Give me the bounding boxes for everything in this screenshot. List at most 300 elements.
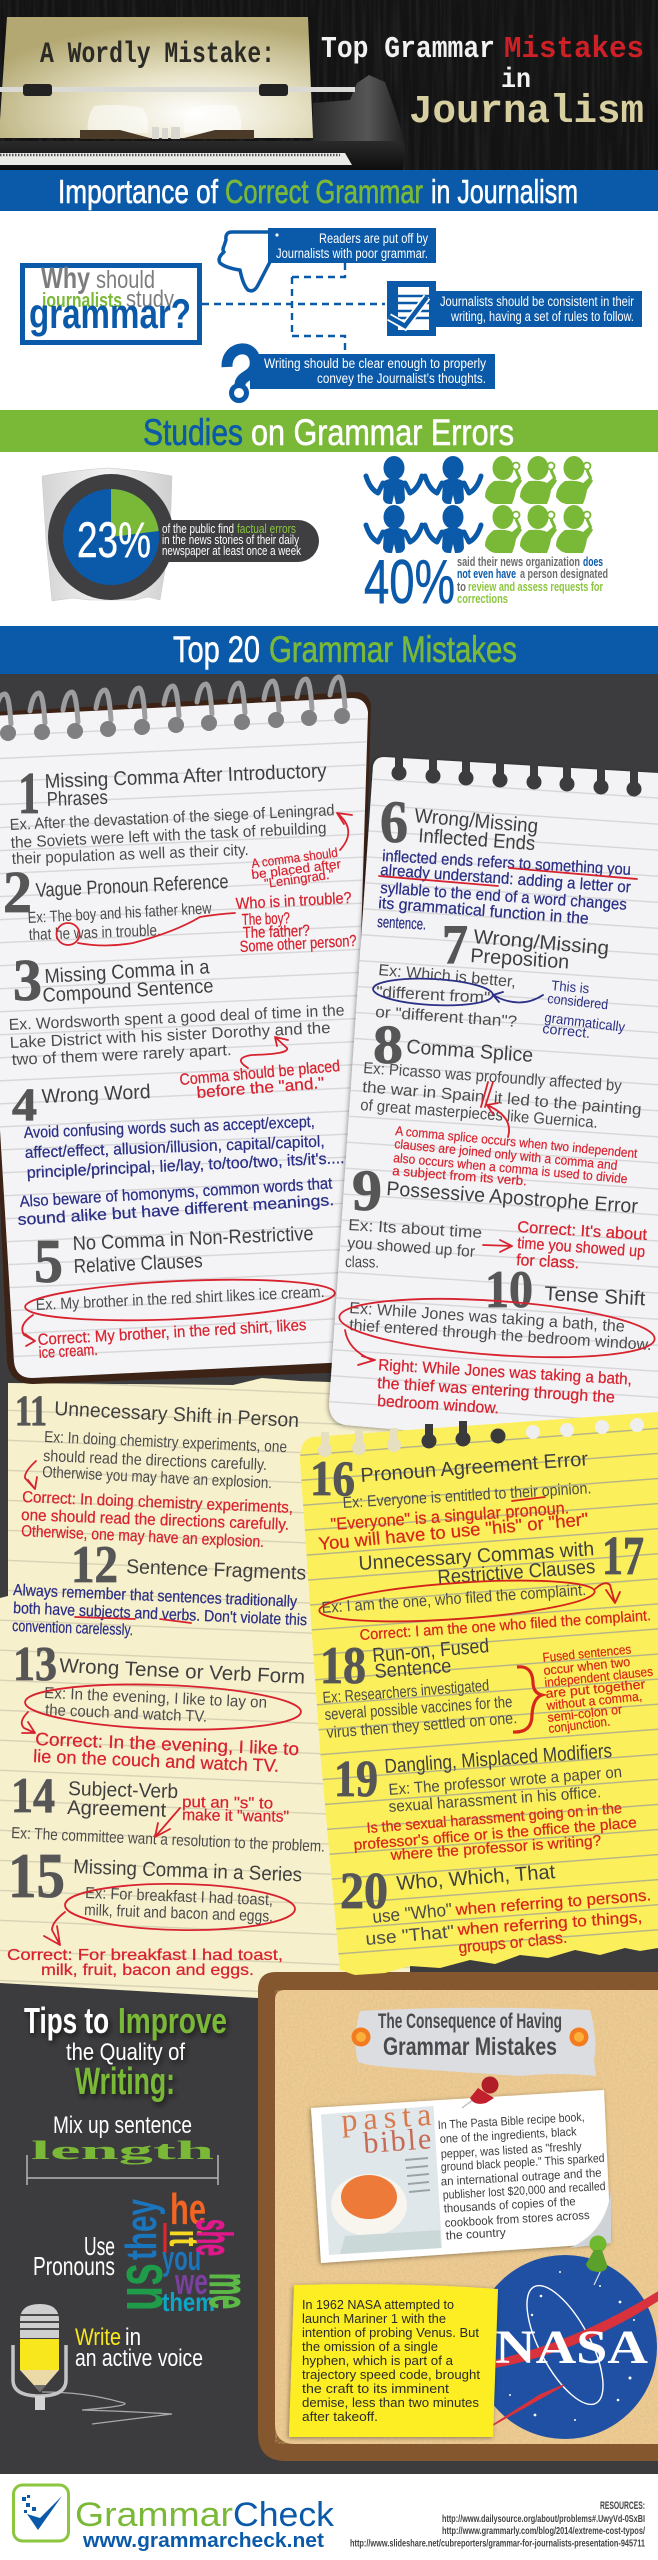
- mistake 18: without a comma,: [545, 1688, 643, 1713]
- mistake 17: Ex: I am the one, who filed the complaint.: [321, 1582, 587, 1617]
- mistake 7: [372, 914, 626, 1041]
- section band: Top 20 Grammar Mistakes: [0, 626, 658, 674]
- typewriter right housing: [313, 75, 405, 170]
- book cover: pasta: [340, 2096, 432, 2138]
- mistake 13: the couch and watch TV.: [45, 1702, 207, 1726]
- mistake 12: 12: [71, 1536, 118, 1594]
- mistake 5: Ex. My brother in the red shirt likes ice cream.: [35, 1284, 325, 1314]
- mistake 10: bedroom window.: [377, 1393, 500, 1417]
- mistake 13: Wrong Tense or Verb Form: [59, 1655, 306, 1689]
- mistake 13: [13, 1636, 306, 1776]
- mistake 6: Wrong/Missing: [414, 805, 539, 838]
- mistake 15: milk, fruit, bacon and eggs.: [41, 1962, 254, 1979]
- mistake 17: Restrictive Clauses: [437, 1556, 596, 1589]
- title: Mistakes: Mistakes: [504, 32, 644, 67]
- mistake 2: Some other person?: [239, 933, 357, 956]
- paper sheet: [329, 757, 658, 1452]
- mistake 19: Is the sexual harassment going on in the: [366, 1800, 623, 1837]
- mistake 20: use "That": [365, 1921, 455, 1949]
- callout: readers: Journalists with poor grammar.: [276, 246, 428, 261]
- panel: corkboard frame: [258, 1972, 658, 2461]
- mistake 8: [360, 1014, 642, 1188]
- icon: thumbs down: [219, 232, 272, 291]
- word cloud: pronouns: you: [162, 2240, 201, 2278]
- mistake 12: Always remember that sentences traditionally: [13, 1582, 297, 1611]
- word cloud: pronouns: them: [162, 2287, 215, 2317]
- mistake 1: the Soviets were left with the task of rebuilding: [10, 820, 327, 852]
- mistake 19: 19: [334, 1751, 378, 1808]
- mistake 9: time you showed up: [517, 1235, 646, 1261]
- stat caption: to: [457, 579, 466, 594]
- binding holes: cream: [318, 1428, 401, 1457]
- mistake 4: affect/effect, allusion/illusion, capital/capitol,: [25, 1133, 325, 1162]
- pill text: [162, 522, 302, 558]
- mistake 9: class.: [345, 1254, 379, 1272]
- mistake 4: Avoid confusing words such as accept/except,: [24, 1114, 315, 1142]
- mistake 14: Ex: The committee want a resolution to the problem.: [11, 1825, 325, 1856]
- mistake 8: 8: [373, 1014, 403, 1075]
- mistake 11: Correct: In doing chemistry experiments,: [22, 1489, 293, 1517]
- mistake 10: thief entered through the bedroom window.: [349, 1317, 652, 1354]
- logo: NASA: NASA: [495, 2321, 648, 2374]
- callout: readers: [268, 228, 436, 263]
- pasta story text: an international outrage and the: [440, 2166, 602, 2188]
- mistake 8: a subject from its verb.: [392, 1163, 528, 1188]
- mistake 20: 20: [340, 1863, 388, 1920]
- callout: clear writing: Writing should be clear enough to properly: [264, 356, 486, 371]
- pasta story text: ground black people." This sparked: [440, 2151, 605, 2174]
- title: in: in: [501, 65, 531, 96]
- mistake 6: sentence.: [377, 914, 427, 934]
- mistake 2: [3, 859, 357, 956]
- mistake 2: Who is in trouble?: [235, 890, 352, 913]
- mistake 10: the thief was entering through the: [377, 1375, 615, 1407]
- section band: Importance of Correct Grammar: in Journalism: [431, 173, 578, 210]
- mistake 3: 3: [13, 947, 42, 1013]
- mistake 8: Comma Splice: [406, 1036, 534, 1067]
- why box: [22, 262, 200, 342]
- stat: 40%: 40%: [364, 548, 455, 617]
- stat caption: does: [583, 554, 603, 569]
- mistake 7: correct.: [542, 1020, 591, 1041]
- mistake 18: are put together: [545, 1676, 647, 1701]
- note: yellow NASA story: launch Mariner 1 with the: [302, 2311, 446, 2326]
- pasta story text: publisher lost $20,000 and recalled: [442, 2179, 606, 2202]
- pasta story text: cookbook from stores across: [444, 2208, 590, 2230]
- mistake 18: [320, 1635, 654, 1742]
- mistake 18: Ex: Researchers investigated: [322, 1678, 490, 1707]
- note: yellow NASA story: In 1962 NASA attempted to: [302, 2297, 454, 2312]
- mistake 8: also occurs when a comma is used to divide: [393, 1150, 628, 1186]
- icon: newspaper: [42, 468, 172, 601]
- mistake 18: semi-colon or: [547, 1702, 623, 1725]
- mistake 10: [338, 1261, 656, 1417]
- mistake 5: Correct: My brother, in the red shirt, likes: [37, 1317, 307, 1349]
- tip: mix up sentence length: [27, 2112, 218, 2185]
- mistake 1: their population as well as their city.: [12, 842, 249, 868]
- type bars: [152, 127, 180, 139]
- mistake 4: Wrong Word: [41, 1081, 151, 1108]
- mistake 3: Lake District with his sister Dorothy and the: [9, 1020, 331, 1052]
- mistake 4: Also beware of homonyms, common words that: [19, 1175, 333, 1211]
- mistake 12: Sentence Fragments: [126, 1556, 307, 1585]
- section band: Top 20 Grammar Mistakes: Top 20: [173, 629, 260, 670]
- mistake 9: you showed up for: [347, 1235, 476, 1261]
- mistake 17: Correct: I am the one who filed the complaint.: [359, 1607, 652, 1644]
- tip: active voice: [75, 2324, 203, 2372]
- mistake 6: already understand: adding a letter or: [380, 862, 632, 897]
- mistake 18: several possible vaccines for the: [324, 1694, 513, 1724]
- tip: use pronouns: Use: [84, 2231, 115, 2261]
- mistake 7: Wrong/Missing: [473, 926, 610, 960]
- panel: cream notepad content 11-15: [7, 1388, 325, 1979]
- panel: studies: [0, 452, 658, 626]
- pasta story text: one of the ingredients, black: [439, 2124, 578, 2146]
- logo wordmark: Grammar: [75, 2496, 233, 2534]
- mistake 9: 9: [352, 1158, 382, 1223]
- stat caption: corrections: [457, 591, 508, 606]
- callout: consistent: [436, 291, 642, 327]
- mistake 11: one should read the directions carefully.: [21, 1507, 289, 1534]
- pie chart 23%: 23%: [77, 512, 151, 568]
- stat caption: not even have: [457, 566, 516, 581]
- mistake 7: considered: [547, 990, 609, 1012]
- mistake 3: Ex. Wordsworth spent a good deal of time in the: [8, 1002, 345, 1034]
- mistake 11: Unnecessary Shift in Person: [54, 1398, 300, 1432]
- mistake 14: 14: [11, 1767, 55, 1823]
- mistake 18: Fused sentences: [542, 1641, 632, 1665]
- mistake 20: use "Who": [371, 1899, 453, 1927]
- mistake 17: Unnecessary Commas with: [358, 1538, 595, 1575]
- note: yellow NASA story: the craft to its imminent: [302, 2381, 449, 2396]
- mistake 3: Compound Sentence: [42, 975, 214, 1007]
- mistake 9: Correct: It's about: [517, 1219, 648, 1244]
- word cloud: pronouns: it: [160, 2230, 209, 2247]
- mistake 6: its grammatical function in the: [378, 895, 589, 928]
- pasta story text: In The Pasta Bible recipe book,: [437, 2110, 585, 2132]
- mistake 8: A comma splice occurs when two independent: [395, 1123, 638, 1161]
- mistake 19: [334, 1740, 637, 1864]
- mistake 1: "Leningrad.": [263, 866, 335, 891]
- panel: cream notepad 11-15 background: [0, 1378, 410, 2000]
- tip: use pronouns: [33, 2231, 115, 2281]
- mistake 3: [8, 947, 345, 1102]
- mistake 4: 4: [12, 1079, 37, 1131]
- notebook backing: [0, 692, 371, 1384]
- mistake 19: professor's office or is the office the place: [353, 1814, 637, 1854]
- pill text: in the news stories of their daily: [162, 533, 300, 547]
- panel: consequence on corkboard: [289, 2008, 658, 2439]
- book cover: [321, 2096, 442, 2255]
- word cloud: pronouns: [102, 2185, 261, 2317]
- keys strip: [0, 153, 352, 165]
- mistake 19: Dangling, Misplaced Modifiers: [384, 1740, 613, 1778]
- mistake 11: [15, 1388, 300, 1551]
- mistake 5: [22, 1223, 336, 1362]
- title left: A Wordly Mistake: A Wordly Mistake:: [40, 38, 275, 72]
- mistake 5: No Comma in Non-Restrictive: [72, 1223, 314, 1255]
- sign: consequence title: Grammar Mistakes: [383, 2033, 557, 2061]
- mistake 8: Ex: Picasso was profoundly affected by: [363, 1060, 622, 1095]
- mistake 4: [12, 1079, 345, 1229]
- mistake 5: ice cream.: [38, 1342, 98, 1362]
- callout: readers: Readers are put off by: [319, 231, 428, 246]
- mistake 7: Preposition: [470, 945, 570, 974]
- mistake 4: sound alike but have different meanings.: [17, 1192, 335, 1229]
- why box: grammar?: [29, 290, 191, 337]
- mistake 2: 2: [3, 859, 32, 925]
- section band: Importance of Correct Grammar: [0, 170, 658, 211]
- mistake 3: before the "and.": [196, 1075, 325, 1102]
- mistake 20: when referring to things,: [456, 1909, 643, 1939]
- mistake 1: Missing Comma After Introductory: [44, 760, 327, 793]
- mistake 18: Run-on, Fused: [372, 1635, 490, 1667]
- panel: why study grammar: [0, 211, 658, 410]
- word cloud: pronouns: I: [162, 2214, 168, 2263]
- tip: mix up sentence length: Mix up sentence: [53, 2112, 192, 2139]
- note: yellow NASA story: the omission of a single: [302, 2339, 438, 2354]
- pictogram: people: [366, 456, 593, 553]
- mistake 20: groups or class.: [458, 1930, 568, 1957]
- tip: active voice: in: [125, 2324, 141, 2351]
- book cover: bible: [362, 2122, 432, 2160]
- mistake 8: clauses are joined only with a comma and: [394, 1136, 618, 1173]
- logo wordmark: [75, 2496, 335, 2552]
- mistake 12: convention carelessly.: [12, 1618, 133, 1639]
- logo wordmark: www.grammarcheck.net: [82, 2530, 324, 2552]
- note: yellow NASA story: after takeoff.: [302, 2409, 378, 2424]
- stat caption: said their news organization: [457, 554, 580, 569]
- mistake 18: Sentence: [374, 1655, 452, 1683]
- mistake 16: [310, 1448, 592, 1554]
- mistake 14: put an "s" to: [182, 1794, 273, 1813]
- mistake 13: lie on the couch and watch TV.: [33, 1746, 279, 1776]
- stat caption: [457, 554, 608, 606]
- word cloud: pronouns: he: [170, 2185, 206, 2234]
- mistake 9: Possessive Apostrophe Error: [386, 1178, 639, 1218]
- pill text: newspaper at least once a week: [162, 544, 302, 558]
- section band: Top 20 Grammar Mistakes: Grammar Mistakes: [269, 629, 517, 670]
- logo wordmark: Check: [233, 2496, 335, 2534]
- spiral rings: [0, 677, 345, 724]
- heading: tips to improve: Tips to: [24, 2000, 109, 2041]
- mistake 15: Missing Comma in a Series: [73, 1856, 302, 1886]
- sign: consequence title: The Consequence of Having: [378, 2010, 562, 2033]
- binding holes: white: [526, 1418, 644, 1439]
- notebook page: [0, 698, 368, 1378]
- typewriter base: [0, 141, 405, 170]
- mistake 3: Missing Comma in a: [44, 956, 211, 988]
- mistake 7: or "different than"?: [375, 1004, 518, 1031]
- sign: consequence title: [352, 2008, 596, 2076]
- pill text: of the public find: [162, 522, 234, 536]
- section band: Studies on Grammar Errors: [0, 410, 658, 453]
- mistake 3: two of them were rarely apart.: [11, 1042, 232, 1069]
- mistake 10: Ex: While Jones was taking a bath, the: [349, 1300, 625, 1336]
- stat caption: review and assess requests for: [468, 579, 603, 594]
- paper sheet: [0, 17, 313, 138]
- mistake 3: Comma should be placed: [179, 1058, 341, 1089]
- icon: green push pin: [586, 2236, 607, 2285]
- footer: [0, 2474, 658, 2560]
- mistake 9: for class.: [516, 1252, 580, 1272]
- icon: checklist: [387, 281, 436, 336]
- mistake 8: of great masterpieces like Guernica.: [360, 1097, 598, 1132]
- mistake 17: [318, 1525, 652, 1644]
- mistake 12: both have subjects and verbs. Don't violate this: [13, 1600, 307, 1629]
- mistake 17: 17: [602, 1525, 644, 1586]
- mistake 15: 15: [8, 1840, 65, 1911]
- pasta story text: thousands of copies of the: [443, 2194, 576, 2215]
- mistake 6: [377, 789, 637, 934]
- mistake 11: 11: [15, 1388, 47, 1435]
- why box: Why: [41, 262, 90, 295]
- note: yellow NASA story: hyphen, which is part of a: [302, 2353, 454, 2368]
- title: Top Grammar: Top Grammar: [321, 32, 495, 67]
- mistake 9: Ex: Its about time: [348, 1217, 483, 1242]
- mistake 19: Ex: The professor wrote a paper on: [388, 1764, 623, 1799]
- mistake 11: Otherwise you may have an explosion.: [42, 1464, 272, 1492]
- mistake 14: Agreement: [67, 1797, 167, 1822]
- mistake 16: You will have to use "his" or "her": [318, 1509, 589, 1554]
- mistake 2: that he was in trouble.: [29, 922, 161, 944]
- mistake 2: The father?: [243, 923, 310, 942]
- note: yellow NASA story: [289, 2284, 498, 2437]
- mistake 1: Phrases: [46, 787, 108, 811]
- mistake 6: Inflected Ends: [418, 825, 536, 855]
- resources: [350, 2500, 645, 2550]
- tip: use pronouns: Pronouns: [33, 2251, 115, 2281]
- mistake 20: [340, 1861, 652, 1957]
- mistake 14: Subject-Verb: [68, 1778, 178, 1803]
- mistake 11: Ex: In doing chemistry experiments, one: [44, 1429, 287, 1456]
- mistake 1: be placed after: [251, 856, 342, 882]
- mistake 6: syllable to the end of a word changes: [380, 880, 627, 914]
- mistake 11: Otherwise, one may have an explosion.: [21, 1523, 264, 1551]
- heading: tips to improve: Writing:: [75, 2061, 175, 2103]
- mistake 18: occur when two: [543, 1654, 631, 1678]
- word cloud: pronouns: us: [102, 2263, 176, 2311]
- tip: active voice: Write: [75, 2324, 121, 2351]
- word cloud: pronouns: she: [186, 2219, 242, 2256]
- logo: GrammarCheck icon: [14, 2485, 68, 2541]
- typewriter cups: [88, 105, 241, 133]
- pasta story text: the country: [445, 2225, 506, 2243]
- note: pasta bible: [311, 2076, 611, 2263]
- mistake 14: [11, 1767, 325, 1856]
- mistake 15: milk, fruit and bacon and eggs.: [84, 1902, 273, 1926]
- mistake 19: sexual harassment in his office.: [388, 1784, 602, 1816]
- mistake 15: [7, 1840, 302, 1979]
- header: typewriter and title: [0, 0, 658, 170]
- mistake 19: where the professor is writing?: [389, 1832, 602, 1864]
- word cloud: pronouns: we: [174, 2261, 208, 2302]
- callout: clear writing: [250, 354, 495, 389]
- heading: tips to improve: Improve: [118, 2000, 227, 2041]
- mistake 2: The boy?: [242, 910, 290, 929]
- mistake 16: "Everyone" is a singular pronoun.: [330, 1498, 570, 1534]
- mistake 14: make it "wants": [182, 1807, 289, 1826]
- why box: should: [96, 266, 155, 294]
- mistake 13: Correct: In the evening, I like to: [35, 1729, 299, 1759]
- panel: tips to improve writing: [13, 2000, 261, 2424]
- mistake 18: 18: [320, 1637, 366, 1695]
- tip: mix up sentence length: length: [31, 2136, 215, 2165]
- mistake 18: conjunction.: [548, 1714, 611, 1736]
- mistake 1: 1: [18, 760, 40, 826]
- pasta story text: pepper, was listed as "freshly: [440, 2139, 582, 2161]
- mistake 1: [9, 760, 352, 891]
- pie chart 23%: [48, 474, 319, 600]
- spiral holes: [0, 708, 350, 741]
- mistake 1: Ex. After the devastation of the siege of Leningrad: [9, 802, 335, 834]
- mistake 12: [12, 1536, 307, 1639]
- mistake 16: Ex: Everyone is entitled to their opinion.: [342, 1480, 592, 1512]
- mistake 13: Ex: In the evening, I like to lay on: [44, 1685, 267, 1712]
- note: yellow NASA story: trajectory speed code, brought: [302, 2367, 480, 2382]
- section band: Studies on Grammar Errors: Studies: [143, 412, 243, 453]
- heading: tips to improve: [24, 2000, 227, 2103]
- pasta story text: [437, 2110, 606, 2243]
- mistake 18: virus then they settled on one.: [326, 1710, 518, 1742]
- mistake 7: Ex: Which is better,: [378, 962, 517, 991]
- icon: pencil microphone: [13, 2304, 172, 2424]
- mistake 9: [345, 1158, 648, 1272]
- logo: NASA: [493, 2255, 658, 2439]
- mistake 7: "different from": [376, 984, 491, 1007]
- why box: study: [126, 286, 174, 313]
- dashed connectors: [202, 262, 385, 354]
- icon: red push pin: [462, 2076, 498, 2108]
- panel: spiral notebook 1-5: [0, 677, 371, 1384]
- mistake 15: Ex: For breakfast I had toast,: [85, 1885, 273, 1909]
- mistake 5: Relative Clauses: [73, 1250, 203, 1278]
- note: yellow NASA story: demise, less than two minutes: [302, 2395, 480, 2410]
- mistake 4: principle/principal, lie/lay, to/too/two, its/it's....: [26, 1150, 345, 1182]
- mistake 7: grammatically: [544, 1009, 626, 1035]
- tip: active voice: an active voice: [75, 2345, 203, 2372]
- mistake 20: when referring to persons.: [454, 1887, 652, 1919]
- section band: Importance of Correct Grammar: Correct Grammar: [225, 173, 423, 210]
- mistake 2: Ex: The boy and his father knew: [27, 900, 212, 927]
- yellow sheet: [300, 1412, 658, 1975]
- panel: yellow torn note 16-20: [300, 1412, 658, 1975]
- mistake 6: 6: [380, 789, 408, 855]
- icon: question mark: [227, 349, 255, 400]
- mistake 8: the war in Spain, it led to the painting: [362, 1079, 642, 1119]
- pill text: factual errors: [237, 522, 296, 536]
- title: Journalism: Journalism: [409, 90, 644, 135]
- panel: white note paper 6-10: [329, 755, 658, 1452]
- mistake 10: Right: While Jones was taking a bath,: [378, 1357, 632, 1389]
- roller bar: [0, 84, 355, 96]
- callout: clear writing: convey the Journalist’s thoughts.: [317, 371, 486, 386]
- heading: tips to improve: the Quality of: [66, 2039, 185, 2066]
- mistake 10: 10: [485, 1261, 533, 1319]
- note: yellow NASA story: intention of probing Venus. But: [302, 2325, 479, 2340]
- section band: Studies on Grammar Errors: on Grammar Errors: [251, 412, 514, 453]
- why box: journalists: [41, 290, 122, 312]
- mistake 7: 7: [442, 914, 468, 976]
- mistake 15: Correct: For breakfast I had toast,: [7, 1947, 283, 1964]
- mistake 6: inflected ends refers to something you: [382, 848, 631, 879]
- stat caption: a person designated: [520, 566, 608, 581]
- mistake 20: Who, Which, That: [396, 1861, 556, 1895]
- mistake 7: This is: [551, 977, 590, 996]
- section band: Importance of Correct Grammar: Importance of: [58, 173, 219, 210]
- word cloud: pronouns: they: [117, 2199, 166, 2260]
- word cloud: pronouns: me: [198, 2273, 261, 2309]
